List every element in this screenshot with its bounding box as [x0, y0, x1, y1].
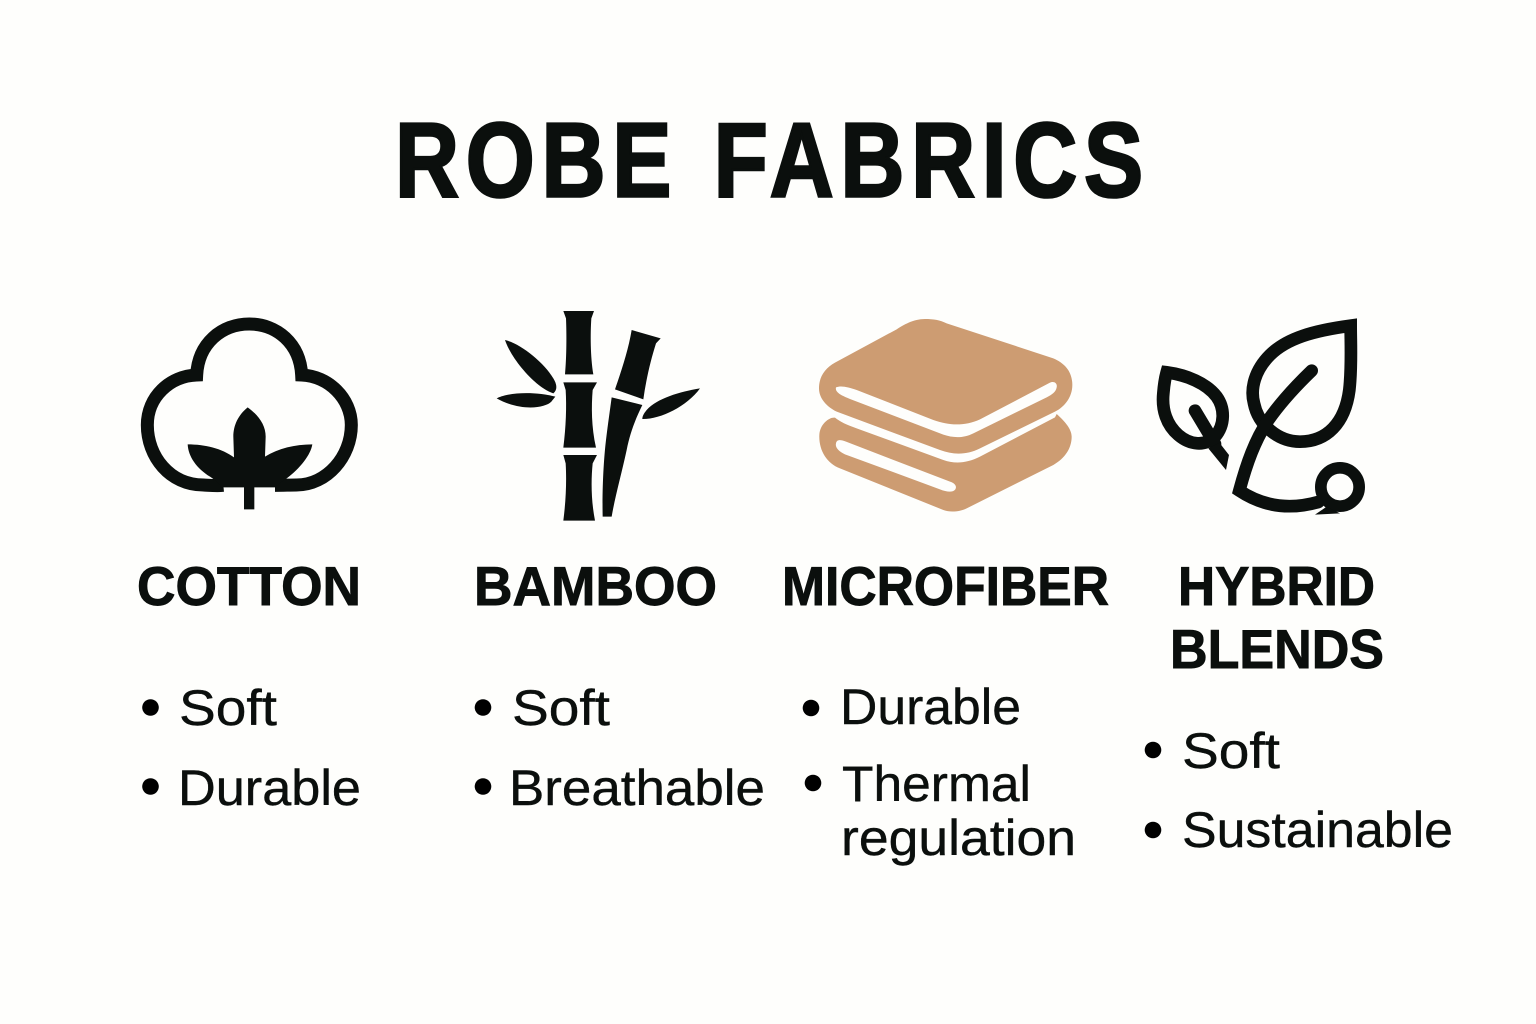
heading: cotton: COTTON: [137, 555, 361, 617]
icon: folded towels: [819, 319, 1072, 512]
bullet: breathable: Breathable: [509, 760, 765, 816]
heading: microfiber: MICROFIBER: [782, 555, 1109, 617]
bullet: soft: [142, 680, 277, 736]
bullet: soft: [475, 680, 610, 736]
heading: bamboo: BAMBOO: [474, 555, 717, 617]
panel: microfiber: [782, 319, 1109, 866]
panel: bamboo: [474, 311, 765, 816]
bullet: thermal regulation: regulation: [841, 810, 1076, 866]
bullet: sustainable: Sustainable: [1182, 802, 1453, 858]
panel: cotton: [137, 324, 361, 816]
bullet: thermal regulation: Thermal: [842, 756, 1031, 812]
icon: leaves and thread: [1163, 326, 1359, 515]
heading: hybrid blends: BLENDS: [1170, 618, 1384, 680]
heading: hybrid blends: HYBRID: [1178, 555, 1375, 617]
icon: cotton boll: [147, 324, 351, 509]
bullet: thermal regulation: [805, 756, 1076, 866]
icon: bamboo: [497, 311, 700, 521]
panel: hybrid blends: [1145, 326, 1453, 858]
bullet: soft: Soft: [1182, 723, 1280, 779]
bullet: durable: Durable: [178, 760, 361, 816]
bullet: durable: Durable: [840, 679, 1021, 735]
heading: hybrid blends: [1170, 555, 1384, 680]
bullet: soft: [1145, 723, 1280, 779]
bullet: soft: Soft: [179, 680, 277, 736]
bullet: soft: Soft: [512, 680, 610, 736]
title: ROBE FABRICS: [395, 101, 1150, 219]
